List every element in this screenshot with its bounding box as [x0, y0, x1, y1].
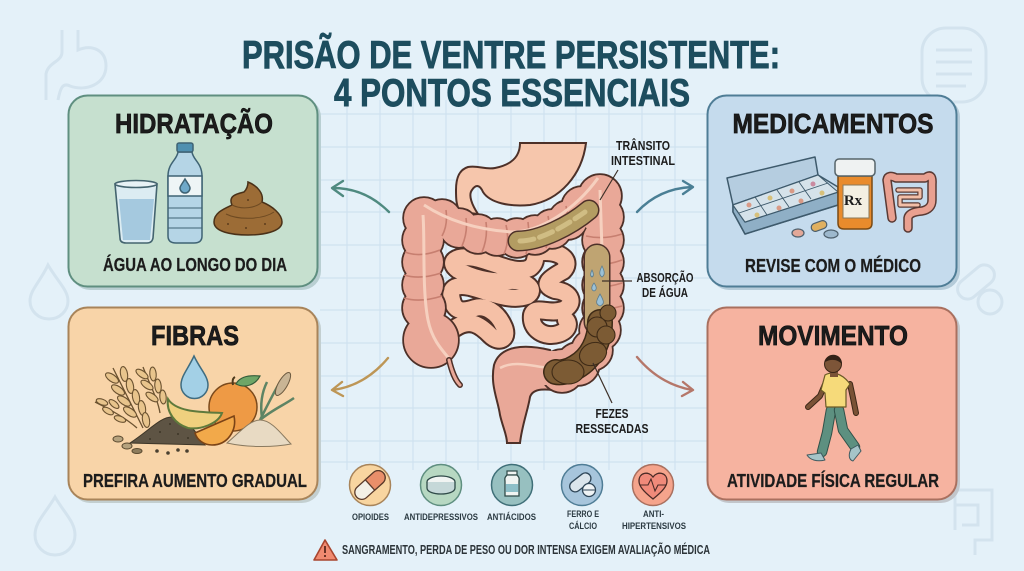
stool in transverse colon — [518, 210, 589, 241]
stomach — [456, 143, 586, 214]
diagram: digestive system — [403, 143, 623, 443]
label: fezes ressecadas: RESSECADAS — [576, 422, 648, 436]
caption: medicamentos: REVISE COM O MÉDICO — [745, 255, 921, 276]
icon: water drop — [181, 356, 208, 398]
leader: trânsito intestinal — [600, 170, 618, 200]
label: anti-hipertensivos — [622, 509, 686, 532]
panel: medicamentos — [708, 96, 960, 290]
label: ferro e cálcio — [567, 509, 599, 532]
icon: prescription bottle: Rx — [844, 193, 863, 209]
label: absorção de água — [636, 270, 694, 300]
background grid — [320, 100, 710, 470]
icon: ferro e cálcio — [562, 464, 602, 506]
icon: stool — [214, 182, 282, 235]
leader: absorção de água — [602, 280, 632, 282]
icon: seed pile — [113, 417, 205, 455]
heading: medicamentos: MEDICAMENTOS — [732, 108, 934, 139]
large intestine — [403, 175, 623, 392]
title: 4 PONTOS ESSENCIAIS — [334, 72, 690, 115]
icon: anti-hipertensivos — [632, 464, 674, 506]
icon: faint intestine bottom — [940, 490, 992, 555]
arrow: to movimento — [637, 357, 693, 396]
label: absorção de água: DE ÁGUA — [642, 285, 688, 300]
label: ferro e cálcio: FERRO E — [567, 509, 599, 520]
heading: movimento: MOVIMENTO — [758, 320, 908, 351]
icon: warning triangle — [314, 540, 337, 560]
icon: loose pills — [792, 220, 838, 238]
label: fezes ressecadas: FEZES — [596, 407, 628, 421]
leader: fezes ressecadas — [593, 363, 612, 403]
label: ferro e cálcio: CÁLCIO — [569, 521, 597, 532]
label: fezes ressecadas — [576, 407, 648, 436]
title: PRISÃO DE VENTRE PERSISTENTE: — [242, 33, 780, 77]
label: anti-hipertensivos: ANTI- — [643, 509, 664, 520]
icon: small colon — [887, 176, 932, 228]
icon: grain pile and reed — [227, 370, 294, 447]
icon: faint water drop left — [30, 265, 68, 319]
icon: glass of water — [115, 180, 157, 243]
icon: melon slice — [168, 399, 222, 428]
panel: fibras — [68, 308, 321, 503]
arrow: to hidratação — [332, 181, 389, 212]
icon: faint intestine — [922, 28, 986, 102]
title — [242, 33, 780, 115]
icon: faint pills — [953, 261, 1002, 314]
caption: movimento: ATIVIDADE FÍSICA REGULAR — [727, 470, 939, 491]
label: trânsito intestinal: INTESTINAL — [611, 154, 675, 168]
caption: fibras: PREFIRA AUMENTO GRADUAL — [83, 471, 307, 491]
panel: movimento — [708, 308, 960, 503]
small intestine — [451, 252, 571, 340]
icon: faint stomach — [46, 30, 106, 100]
icon: walking person — [807, 355, 861, 461]
icon: orange slice — [195, 416, 235, 445]
icon: faint water drop bottom — [35, 497, 75, 555]
icon: opioides — [350, 464, 390, 506]
icon: water bottle — [168, 143, 202, 243]
rectum — [493, 347, 565, 443]
icon: prescription bottle — [835, 159, 875, 229]
icon: antiácidos — [492, 464, 532, 506]
icon: wheat stalks — [95, 366, 167, 428]
label: anti-hipertensivos: HIPERTENSIVOS — [622, 521, 686, 532]
icon: pill organizer — [727, 157, 838, 234]
stool in descending colon — [552, 257, 616, 384]
arrow: to fibras — [332, 358, 388, 396]
arrow: to medicamentos — [637, 181, 693, 212]
heading: hidratação: HIDRATAÇÃO — [115, 108, 273, 139]
label: absorção de água: ABSORÇÃO — [636, 270, 694, 285]
panel: hidratação — [68, 96, 321, 290]
caption: hidratação: ÁGUA AO LONGO DO DIA — [103, 254, 287, 275]
label: antiácidos: ANTIÁCIDOS — [487, 512, 536, 523]
label: antidepressivos: ANTIDEPRESSIVOS — [404, 512, 478, 523]
warning text: SANGRAMENTO, PERDA DE PESO OU DOR INTENSA EXIGEM AVALIAÇÃO MÉDICA — [342, 542, 710, 557]
heading: fibras: FIBRAS — [151, 320, 239, 351]
icon: antidepressivos — [420, 464, 462, 506]
label: opioides: OPIOIDES — [352, 512, 389, 523]
label: trânsito intestinal: TRÂNSITO — [616, 138, 670, 153]
label: trânsito intestinal — [611, 138, 675, 168]
icon: orange with leaf — [209, 376, 260, 431]
